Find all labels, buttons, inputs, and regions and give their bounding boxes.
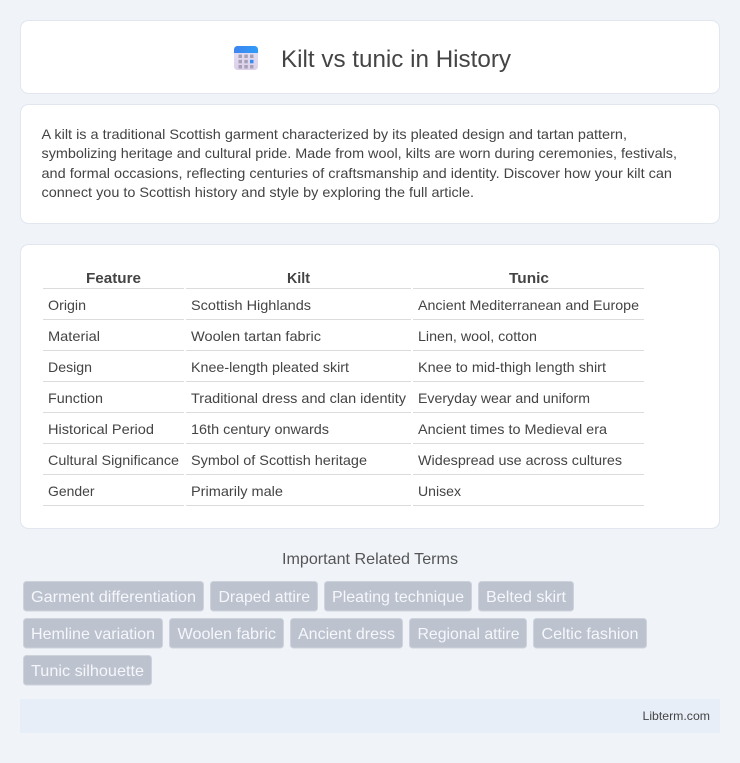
tag: draped attire: Draped attire (218, 589, 310, 606)
tag: celtic fashion (534, 618, 646, 648)
table header row: Feature (86, 270, 141, 287)
tag: belted skirt (478, 582, 574, 611)
table row: historical period: Ancient times to Medieval era (418, 421, 607, 437)
panel: header (20, 20, 720, 94)
table row: design (43, 359, 644, 382)
tag: woolen fabric: Woolen fabric (178, 626, 276, 643)
table header row: Kilt (287, 270, 310, 287)
table row: historical period: 16th century onwards (191, 421, 329, 437)
table header row: Tunic (509, 270, 549, 287)
table row: cultural significance: Widespread use across cultures (418, 452, 622, 468)
table row: design: Knee to mid-thigh length shirt (418, 359, 606, 375)
table row: gender: Primarily male (191, 483, 283, 499)
heading: important related terms: Important Related Terms (282, 551, 458, 568)
table row: gender (43, 483, 644, 506)
table row: historical period: Historical Period (48, 421, 154, 437)
text block: introduction (42, 126, 677, 200)
title: Kilt vs tunic in History (281, 46, 511, 73)
table row: design: Design (48, 359, 92, 375)
table row: origin (43, 297, 644, 320)
table row: material: Material (48, 328, 100, 344)
tag: hemline variation: Hemline variation (31, 626, 155, 643)
table row: origin: Origin (48, 297, 86, 313)
table row: function: Everyday wear and uniform (418, 390, 590, 406)
tag: hemline variation (24, 618, 162, 648)
footer source text: Libterm.com (642, 709, 710, 723)
table row: gender: Unisex (418, 483, 461, 499)
table row: historical period (43, 421, 644, 444)
tag: draped attire (210, 582, 318, 611)
table row: cultural significance (43, 452, 644, 475)
tag: ancient dress (290, 618, 402, 648)
tag: tunic silhouette: Tunic silhouette (31, 663, 144, 680)
text block: introduction: and formal occasions, reflecting centuries of craftsmanship and identity. Discover how your kilt can (42, 165, 672, 181)
table row: cultural significance: Symbol of Scottish heritage (191, 452, 367, 468)
table row: function: Function (48, 390, 103, 406)
tag: ancient dress: Ancient dress (298, 626, 395, 643)
text block: introduction: symbolizing heritage and cultural pride. Made from wool, kilts are worn during ceremonies, festivals, (42, 145, 677, 161)
table row: cultural significance: Cultural Significance (48, 452, 179, 468)
tag: woolen fabric (170, 618, 284, 648)
tag: pleating technique (324, 582, 472, 611)
tag: tunic silhouette (24, 656, 152, 685)
tag: regional attire: Regional attire (418, 626, 520, 643)
table row: origin: Ancient Mediterranean and Europe (418, 297, 639, 313)
icon: calendar (234, 46, 258, 70)
table row: material: Woolen tartan fabric (191, 328, 321, 344)
table header row (43, 270, 644, 289)
tag: belted skirt: Belted skirt (486, 589, 567, 606)
tag: garment differentiation: Garment differentiation (31, 589, 196, 606)
tag: regional attire (410, 618, 526, 648)
tag: celtic fashion: Celtic fashion (542, 626, 638, 643)
table row: function (43, 390, 644, 413)
table row: material (43, 328, 644, 351)
panel: introduction (20, 104, 720, 224)
text block: introduction: connect you to Scottish history and style by exploring the full article. (42, 184, 474, 200)
footer (20, 699, 720, 733)
tag: pleating technique: Pleating technique (332, 589, 464, 606)
table row: gender: Gender (48, 483, 95, 499)
table row: function: Traditional dress and clan identity (191, 390, 406, 406)
panel: comparison table (20, 244, 720, 528)
table row: design: Knee-length pleated skirt (191, 359, 349, 375)
tag list: related terms (24, 582, 646, 685)
table row: material: Linen, wool, cotton (418, 328, 537, 344)
tag: garment differentiation (24, 582, 204, 611)
text block: introduction: A kilt is a traditional Scottish garment characterized by its pleated design and tartan pattern, (42, 126, 627, 142)
table row: origin: Scottish Highlands (191, 297, 311, 313)
